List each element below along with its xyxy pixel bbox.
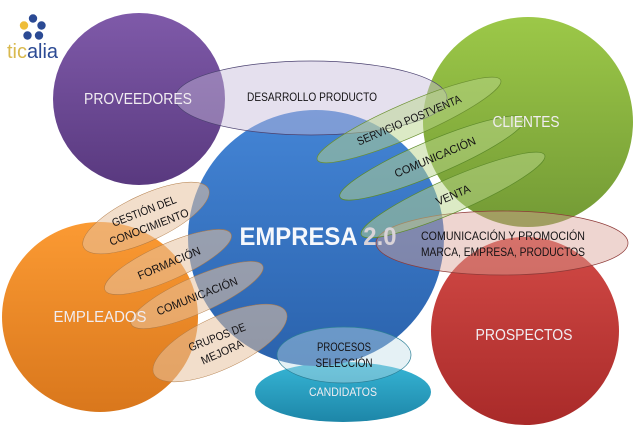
logo: ticalia: ticalia xyxy=(7,41,59,63)
circle: proveedores xyxy=(53,13,225,185)
label: proveedores: PROVEEDORES xyxy=(84,91,192,108)
ellipse: comunicación empleados xyxy=(124,249,270,341)
label: desarrollo producto: DESARROLLO PRODUCTO xyxy=(247,92,377,104)
ellipse: candidatos xyxy=(255,362,431,422)
ellipse: gestión del conocimiento xyxy=(74,168,218,268)
circle: clientes xyxy=(423,17,633,227)
logo: ticalia xyxy=(7,14,59,63)
label: procesos selección xyxy=(316,342,372,370)
ellipse: procesos selección xyxy=(277,327,411,383)
label: grupos de mejora: GRUPOS DE xyxy=(187,321,248,354)
label: candidatos: CANDIDATOS xyxy=(309,385,377,399)
label: comunicación empleados: COMUNICACIÓN xyxy=(155,275,240,318)
label: venta: VENTA xyxy=(434,183,473,208)
label: servicio postventa: SERVICIO POSTVENTA xyxy=(355,93,464,148)
label: empleados: EMPLEADOS xyxy=(54,309,146,326)
label: comunicación y promoción: COMUNICACIÓN Y PROMOCIÓN xyxy=(421,230,585,243)
circle: prospectos xyxy=(431,237,619,425)
label: formación: FORMACIÓN xyxy=(136,244,203,283)
title: empresa 2.0: EMPRESA 2.0 xyxy=(240,223,396,251)
ellipse: comunicación y promoción xyxy=(376,211,628,275)
ellipse: comunicación clientes xyxy=(333,103,531,213)
label: grupos de mejora: MEJORA xyxy=(199,338,246,368)
circle: empresa 2.0 xyxy=(188,110,444,366)
label: procesos selección: SELECCIÓN xyxy=(316,357,372,370)
ellipse: desarrollo producto xyxy=(175,61,447,135)
label: grupos de mejora xyxy=(187,321,248,368)
circle: empleados xyxy=(2,222,198,412)
label: prospectos: PROSPECTOS xyxy=(476,327,572,344)
label: clientes: CLIENTES xyxy=(492,114,560,131)
label: gestión del conocimiento: GESTIÓN DEL xyxy=(110,193,179,230)
ellipse: formación xyxy=(98,217,238,307)
label: comunicación y promoción: MARCA, EMPRESA, PRODUCTOS xyxy=(421,247,585,259)
label: comunicación y promoción xyxy=(421,230,585,259)
ellipse: grupos de mejora xyxy=(143,289,297,397)
label: gestión del conocimiento: CONOCIMIENTO xyxy=(108,207,191,249)
label: procesos selección: PROCESOS xyxy=(317,342,371,354)
label: comunicación clientes: COMUNICACIÓN xyxy=(393,134,478,180)
ellipse: servicio postventa xyxy=(311,65,507,175)
ellipse: venta xyxy=(355,140,551,250)
